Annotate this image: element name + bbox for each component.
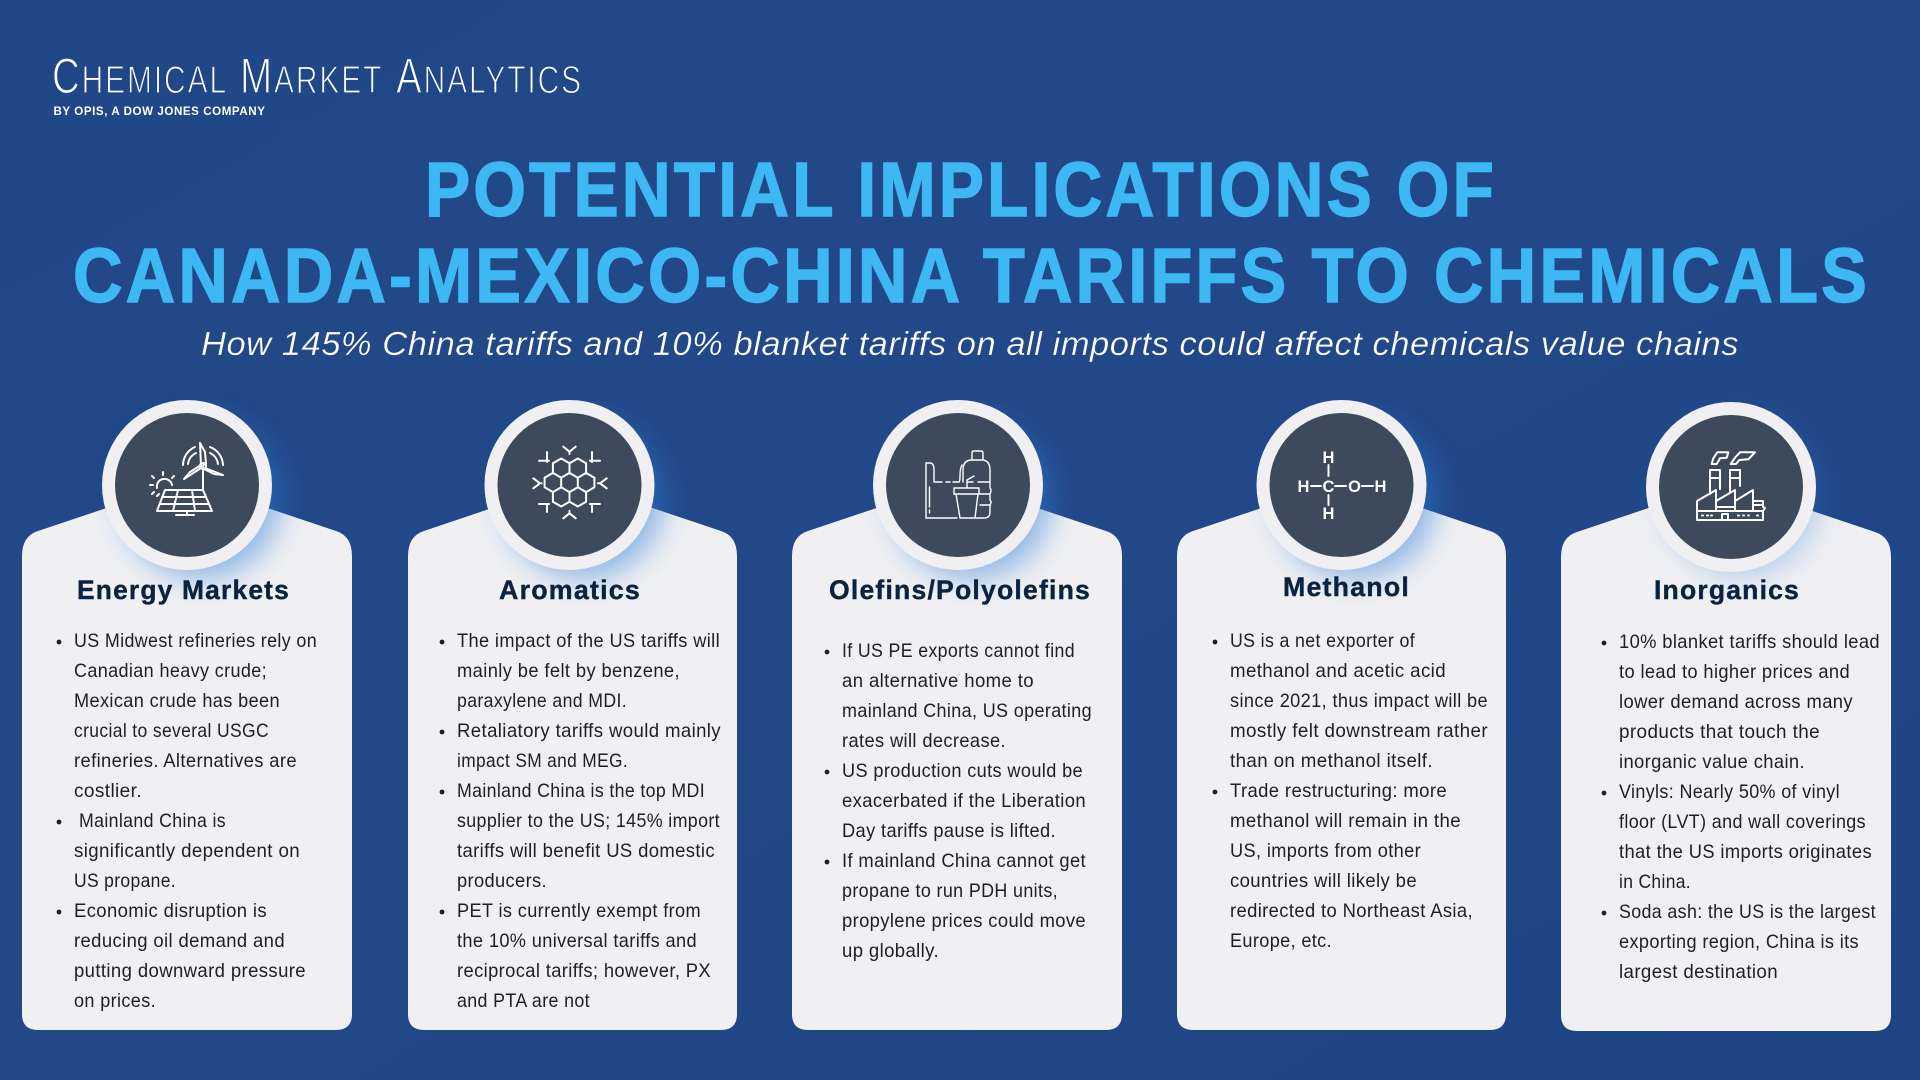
bullet list: Aromatics: The impact of the US tariffs will — [457, 630, 720, 652]
icon: methanol structural formula — [1298, 449, 1386, 523]
bullet list: Energy Markets: on prices. — [74, 990, 156, 1012]
bullet list: Methanol: redirected to Northeast Asia, — [1230, 900, 1473, 922]
panel: Methanol — [1177, 400, 1506, 1030]
bullet list: Inorganics: lower demand across many — [1619, 691, 1853, 713]
bullet list: Aromatics: producers. — [457, 870, 547, 892]
bullet list: Methanol: methanol will remain in the — [1230, 810, 1461, 832]
bullet list: Aromatics: Retaliatory tariffs would mainly — [457, 720, 721, 742]
bullet list: Olefins/Polyolefins — [825, 640, 1092, 962]
icon: methanol structural formula: H — [1323, 449, 1334, 467]
bullet list: Olefins/Polyolefins: propane to run PDH units, — [842, 880, 1058, 902]
bullet list: Olefins/Polyolefins: mainland China, US operating — [842, 700, 1092, 722]
logo: CHEMICAL MARKET ANALYTICS — [52, 48, 583, 104]
bullet list: Aromatics: impact SM and MEG. — [457, 750, 628, 772]
bullet list: Olefins/Polyolefins: propylene prices could move — [842, 910, 1086, 932]
panel: Energy Markets — [22, 400, 352, 1030]
title: POTENTIAL IMPLICATIONS OF — [425, 147, 1497, 233]
bullet list: Inorganics: to lead to higher prices and — [1619, 661, 1850, 683]
title — [73, 147, 1870, 319]
bullet list: Methanol: Trade restructuring: more — [1230, 780, 1447, 802]
bullet list: Energy Markets: crucial to several USGC — [74, 720, 269, 742]
bullet list: Aromatics — [440, 630, 721, 1012]
bullet list: Energy Markets: US propane. — [74, 870, 176, 892]
icon: factory with chimneys — [1697, 452, 1765, 520]
bullet list: Methanol: mostly felt downstream rather — [1230, 720, 1488, 742]
bullet list: Inorganics: 10% blanket tariffs should lead — [1619, 631, 1880, 653]
bullet list: Energy Markets: putting downward pressure — [74, 960, 306, 982]
subtitle: How 145% China tariffs and 10% blanket tariffs on all imports could affect chemicals value chains — [201, 325, 1739, 362]
bullet list: Inorganics: Soda ash: the US is the largest — [1619, 901, 1876, 923]
icon: methanol structural formula: H — [1323, 505, 1334, 523]
bullet list: Methanol: Europe, etc. — [1230, 930, 1332, 952]
bullet list: Aromatics: PET is currently exempt from — [457, 900, 701, 922]
bullet list: Olefins/Polyolefins: Day tariffs pause is lifted. — [842, 820, 1056, 842]
heading: Methanol: Methanol — [1283, 572, 1410, 602]
bullet list: Methanol — [1213, 630, 1488, 952]
icon: hexagon molecule — [533, 447, 607, 518]
bullet list: Inorganics: exporting region, China is its — [1619, 931, 1859, 953]
bullet list: Energy Markets: Mainland China is — [79, 810, 226, 832]
panel: Inorganics — [1561, 402, 1891, 1031]
bullet list: Energy Markets — [57, 630, 317, 1012]
panel: Olefins/Polyolefins — [792, 400, 1122, 1030]
panel: Aromatics — [408, 400, 737, 1030]
icon: plastic bag, cup and bottle — [926, 451, 991, 518]
bullet list: Methanol: than on methanol itself. — [1230, 750, 1433, 772]
bullet list: Methanol: US is a net exporter of — [1230, 630, 1415, 652]
bullet list: Methanol: since 2021, thus impact will be — [1230, 690, 1488, 712]
heading: Inorganics: Inorganics — [1654, 575, 1800, 605]
bullet list: Olefins/Polyolefins: up globally. — [842, 940, 939, 962]
bullet list: Inorganics: in China. — [1619, 871, 1691, 893]
icon: methanol structural formula: H — [1375, 478, 1386, 496]
bullet list: Inorganics: products that touch the — [1619, 721, 1820, 743]
bullet list: Olefins/Polyolefins: exacerbated if the Liberation — [842, 790, 1086, 812]
heading: Aromatics: Aromatics — [499, 575, 641, 605]
bullet list: Olefins/Polyolefins: If US PE exports cannot find — [842, 640, 1075, 662]
icon: methanol structural formula: H — [1298, 478, 1309, 496]
bullet list: Energy Markets: significantly dependent on — [74, 840, 300, 862]
icon: methanol structural formula: C — [1323, 478, 1335, 496]
heading: Olefins/Polyolefins: Olefins/Polyolefins — [829, 575, 1091, 605]
icon: methanol structural formula: O — [1348, 478, 1361, 496]
bullet list: Aromatics: supplier to the US; 145% import — [457, 810, 720, 832]
bullet list: Methanol: methanol and acetic acid — [1230, 660, 1446, 682]
bullet list: Inorganics — [1602, 631, 1880, 983]
bullet list: Olefins/Polyolefins: If mainland China cannot get — [842, 850, 1086, 872]
bullet list: Energy Markets: Economic disruption is — [74, 900, 267, 922]
bullet list: Methanol: countries will likely be — [1230, 870, 1417, 892]
bullet list: Olefins/Polyolefins: an alternative home to — [842, 670, 1034, 692]
bullet list: Energy Markets: Canadian heavy crude; — [74, 660, 267, 682]
bullet list: Energy Markets: Mexican crude has been — [74, 690, 280, 712]
bullet list: Energy Markets: costlier. — [74, 780, 142, 802]
logo: BY OPIS, A DOW JONES COMPANY — [54, 104, 266, 118]
bullet list: Aromatics: the 10% universal tariffs and — [457, 930, 697, 952]
bullet list: Energy Markets: refineries. Alternatives are — [74, 750, 297, 772]
icon: solar panel and wind turbine — [150, 443, 223, 515]
bullet list: Aromatics: and PTA are not — [457, 990, 590, 1012]
bullet list: Inorganics: that the US imports originates — [1619, 841, 1872, 863]
bullet list: Aromatics: reciprocal tariffs; however, PX — [457, 960, 711, 982]
bullet list: Aromatics: mainly be felt by benzene, — [457, 660, 680, 682]
bullet list: Aromatics: tariffs will benefit US domestic — [457, 840, 715, 862]
bullet list: Energy Markets: reducing oil demand and — [74, 930, 285, 952]
bullet list: Inorganics: floor (LVT) and wall coverings — [1619, 811, 1866, 833]
bullet list: Inorganics: inorganic value chain. — [1619, 751, 1805, 773]
bullet list: Methanol: US, imports from other — [1230, 840, 1421, 862]
bullet list: Olefins/Polyolefins: rates will decrease. — [842, 730, 1006, 752]
bullet list: Olefins/Polyolefins: US production cuts would be — [842, 760, 1083, 782]
bullet list: Aromatics: Mainland China is the top MDI — [457, 780, 705, 802]
bullet list: Aromatics: paraxylene and MDI. — [457, 690, 627, 712]
bullet list: Inorganics: Vinyls: Nearly 50% of vinyl — [1619, 781, 1840, 803]
bullet list: Energy Markets: US Midwest refineries rely on — [74, 630, 317, 652]
heading: Energy Markets: Energy Markets — [77, 575, 290, 605]
bullet list: Inorganics: largest destination — [1619, 961, 1778, 983]
